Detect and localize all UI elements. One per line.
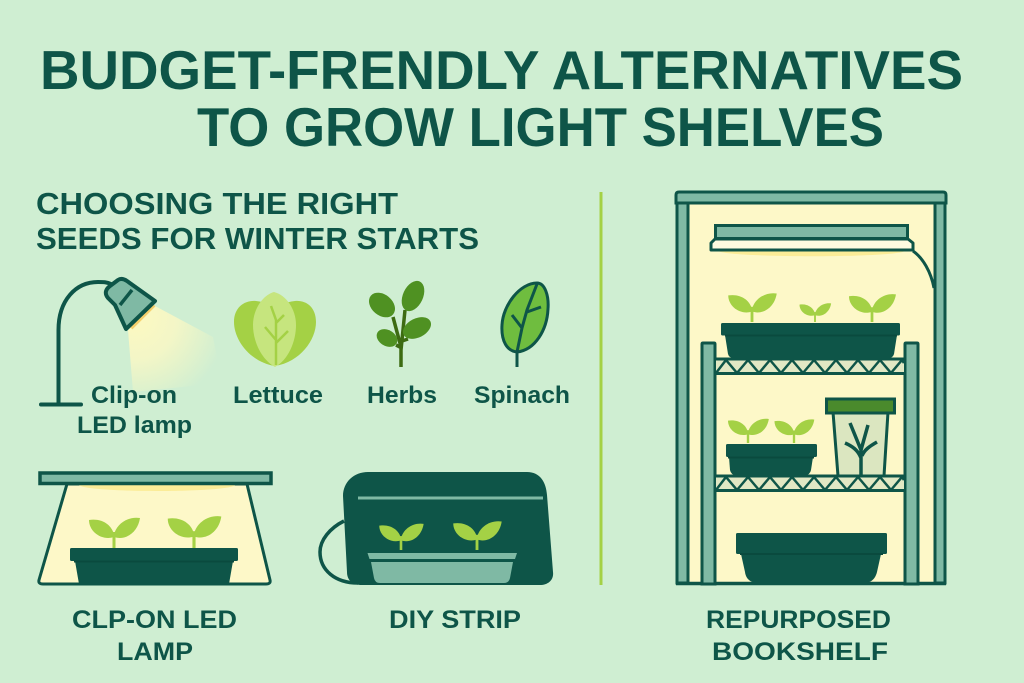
- label: repurposed bookshelf: [706, 606, 891, 666]
- icon: spinach: [502, 283, 548, 367]
- title: TO GROW LIGHT SHELVES: [197, 96, 884, 158]
- label: clip-on LED lamp option: [72, 606, 237, 666]
- label: repurposed bookshelf: REPURPOSED: [706, 606, 891, 634]
- shelf frame: [676, 192, 946, 584]
- icon: lettuce: [234, 292, 316, 367]
- upright posts: [702, 343, 918, 584]
- label: DIY strip: DIY STRIP: [389, 606, 521, 634]
- top tray: [721, 323, 900, 358]
- label: lettuce: Lettuce: [233, 382, 323, 409]
- icon: clip-on lamp: [41, 279, 222, 404]
- label: spinach: Spinach: [474, 382, 570, 409]
- label: clip-on LED lamp: Clip-on: [91, 382, 177, 409]
- section heading: CHOOSING THE RIGHT: [36, 186, 398, 221]
- illustration: repurposed bookshelf: [676, 192, 946, 584]
- grow light: [711, 226, 934, 288]
- icon: clip-on lamp tray: [39, 473, 271, 584]
- label: clip-on LED lamp option: LAMP: [117, 638, 193, 666]
- divider: [600, 192, 602, 585]
- label: clip-on LED lamp option: CLP-ON LED: [72, 606, 237, 634]
- wire shelf lower: [715, 476, 905, 490]
- large pot: [736, 533, 887, 583]
- label: repurposed bookshelf: BOOKSHELF: [712, 638, 888, 666]
- title: [40, 39, 963, 158]
- seedlings top tray: [728, 293, 896, 322]
- section heading: [36, 186, 479, 256]
- icon: DIY strip: [320, 472, 553, 585]
- label: herbs: Herbs: [367, 382, 437, 409]
- section heading: SEEDS FOR WINTER STARTS: [36, 221, 479, 256]
- label: clip-on LED lamp: LED lamp: [77, 412, 192, 439]
- jar with plant: [826, 399, 894, 476]
- wire shelf upper: [715, 359, 905, 374]
- small pot with seedlings: [726, 419, 817, 475]
- label: clip-on LED lamp: [77, 382, 192, 439]
- title: BUDGET-FRENDLY ALTERNATIVES: [40, 39, 963, 101]
- icon: herbs: [364, 277, 435, 367]
